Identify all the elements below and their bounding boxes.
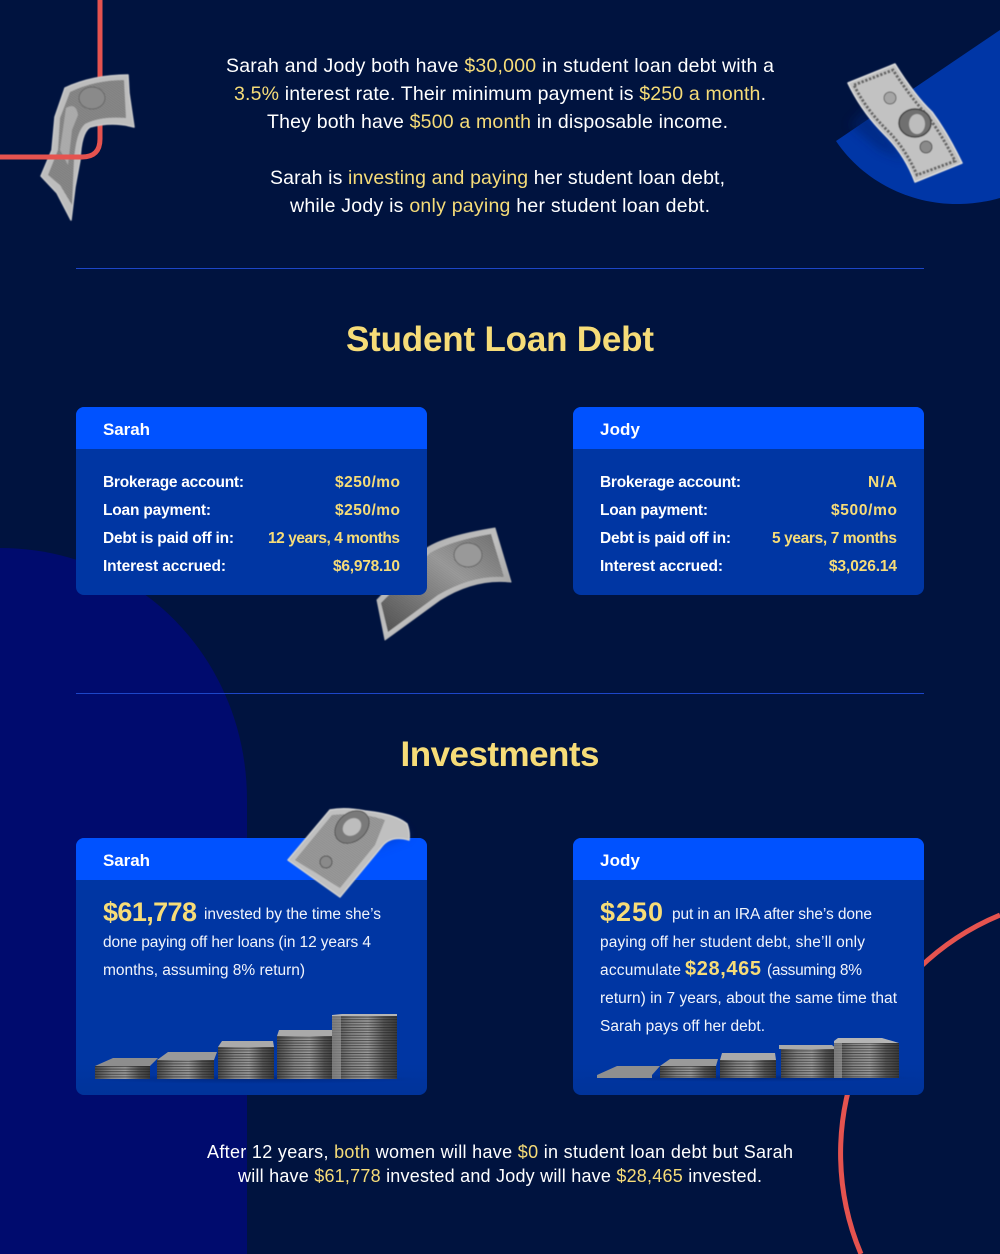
panel: Sarah student loan debt: Interest accrued: [103,558,226,575]
chart: smaller cash stacks [580,1038,920,1082]
panel: Sarah student loan debt: $250/mo [335,502,400,519]
closing text block [207,1142,793,1186]
panel: Jody student loan debt [573,407,924,595]
panel: Jody student loan debt: $3,026.14 [829,558,897,575]
icon: curved dollar bill behind Sarah card [377,528,511,640]
intro text block: They both have $500 a month in disposable income. [267,111,728,133]
icon: curled dollar bill top left [41,75,134,220]
panel: Sarah student loan debt [76,407,427,595]
investment summary text: (assuming 8% [767,962,862,979]
panel: Jody student loan debt: Brokerage account: [600,474,741,491]
panel: Sarah student loan debt: Debt is paid off in: [103,530,234,547]
decorative shape: left navy panel [0,548,247,1254]
decorative line: top left red corner [0,0,100,157]
intro text block: while Jody is only paying her student loan debt. [289,195,710,217]
investment summary text: accumulate [600,962,681,979]
closing text block: will have $61,778 invested and Jody will have $28,465 invested. [237,1166,762,1186]
panel: Jody student loan debt: $500/mo [831,502,897,519]
panel: Sarah investments: Sarah [103,851,150,870]
panel: Sarah student loan debt: $250/mo [335,474,400,491]
panel: Jody student loan debt: Interest accrued: [600,558,723,575]
panel: Jody student loan debt: N/A [868,474,897,491]
heading: student loan debt: Student Loan Debt [346,320,654,359]
panel: Jody student loan debt: 5 years, 7 months [772,530,897,547]
panel: Jody investments [573,838,924,1095]
decorative line: bottom right red circle [841,915,1000,1254]
intro text block: Sarah is investing and paying her student loan debt, [270,167,725,189]
investment summary text [600,897,898,1035]
closing text block: After 12 years, both women will have $0 in student loan debt but Sarah [207,1142,793,1162]
panel: Jody student loan debt: Loan payment: [600,502,708,519]
panel: Jody student loan debt: Debt is paid off in: [600,530,731,547]
investment summary text [103,897,381,979]
panel: Jody investments: Jody [600,851,641,870]
decorative line: red segment over bill [0,154,82,160]
panel: Sarah student loan debt: Loan payment: [103,502,211,519]
heading: investments: Investments [400,735,600,774]
panel: Sarah student loan debt: Brokerage account: [103,474,244,491]
icon: curled hundred dollar bill on Sarah card [288,804,409,897]
investment summary text: $250 [600,897,663,927]
investment summary text: invested by the time she’s [204,906,381,923]
panel: Sarah student loan debt: Sarah [103,420,150,439]
investment summary text: Sarah pays off her debt. [600,1018,765,1035]
intro text block: 3.5% interest rate. Their minimum payment is $250 a month. [234,83,766,105]
icon: dollar bill top right [848,64,962,182]
investment summary text: $28,465 [685,958,761,980]
panel: Sarah student loan debt: 12 years, 4 months [268,530,400,547]
panel: Sarah student loan debt: $6,978.10 [333,558,400,575]
investment summary text: return) in 7 years, about the same time that [600,990,898,1007]
investment summary text: put in an IRA after she’s done [672,906,872,923]
investment summary text: months, assuming 8% return) [103,962,305,979]
investment summary text: done paying off her loans (in 12 years 4 [103,934,371,951]
intro text block: Sarah and Jody both have $30,000 in student loan debt with a [226,55,774,77]
investment summary text: $61,778 [103,897,197,927]
panel: Sarah investments [76,838,427,1095]
decorative shape: top right blue arc [836,30,1000,204]
intro text block [226,55,774,217]
panel: Jody student loan debt: Jody [600,420,641,439]
chart: growing cash stacks [82,1014,422,1084]
investment summary text: paying off her student debt, she’ll only [600,934,865,951]
